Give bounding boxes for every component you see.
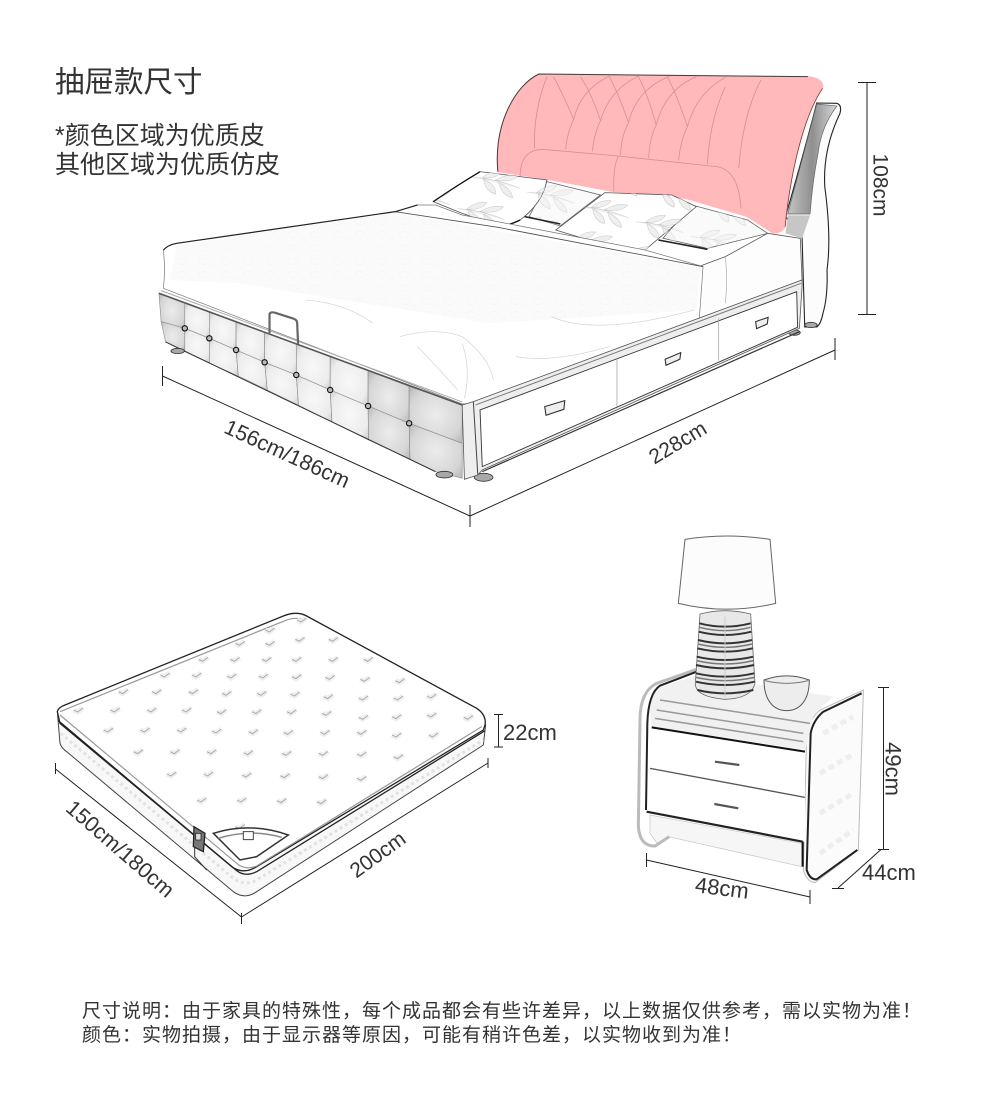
- dimension: mattress width 150cm/180cm: [56, 763, 242, 924]
- bowl: [764, 676, 809, 711]
- duvet: [163, 205, 703, 404]
- tufted foot panel: [159, 291, 462, 478]
- bottom panel: [650, 815, 802, 867]
- corner badge: [213, 828, 288, 860]
- mattress side: [57, 712, 486, 896]
- dimension: nightstand height 49cm: 49cm: [880, 742, 906, 796]
- dimension: mattress height 22cm: 22cm: [503, 720, 557, 745]
- lamp base: [695, 611, 755, 699]
- illustration: mattress: [57, 613, 486, 896]
- drawer fronts: [647, 727, 805, 842]
- left frame: [638, 669, 697, 846]
- dimension: nightstand depth 44cm: [832, 850, 916, 888]
- dimension: mattress length 200cm: [242, 758, 488, 917]
- illustration: bed: [159, 74, 841, 481]
- front post and rail: [462, 280, 802, 479]
- material note: *颜色区域为优质皮: [55, 122, 265, 150]
- panel buttons: [182, 326, 412, 426]
- dimension: nightstand width 48cm: [646, 853, 810, 904]
- dimension: bed depth 156cm/186cm: [162, 366, 470, 527]
- bed feet: [171, 322, 817, 481]
- front pillow left: [433, 172, 547, 225]
- leather headboard: [497, 74, 823, 233]
- dimension: bed length 228cm: [470, 338, 835, 516]
- footnote: [82, 1000, 922, 1046]
- dimension: nightstand width 48cm: 48cm: [694, 872, 750, 904]
- front pillow right: [556, 193, 696, 250]
- material note: 其他区域为优质仿皮: [55, 151, 280, 179]
- dimension: nightstand height 49cm: [878, 688, 906, 850]
- side panel: [803, 690, 863, 883]
- dimension: mattress width 150cm/180cm: 150cm/180cm: [61, 796, 179, 902]
- title: 抽屉款尺寸: [55, 66, 203, 99]
- mattress top: [57, 613, 485, 871]
- dimension: bed height 108cm: 108cm: [868, 153, 892, 217]
- footnote: 尺寸说明：由于家具的特殊性，每个成品都会有些许差异，以上数据仅供参考，需以实物为准！: [82, 1000, 922, 1022]
- lift handle: [270, 312, 298, 344]
- sheet on right of bed: [699, 233, 802, 320]
- zipper tag: [193, 827, 207, 870]
- table lamp: [678, 536, 776, 699]
- quilted marks: [74, 618, 473, 829]
- dimension: mattress length 200cm: 200cm: [346, 827, 410, 883]
- drawers: [480, 292, 799, 472]
- back pillow right: [663, 205, 768, 248]
- material note: [55, 122, 280, 179]
- footnote: 颜色：实物拍摄，由于显示器等原因，可能有稍许色差，以实物收到为准！: [82, 1024, 742, 1046]
- dimension: bed height 108cm: [858, 82, 892, 314]
- bed side panel: [786, 103, 841, 327]
- lamp shade: [678, 536, 776, 609]
- dimension: bed depth 156cm/186cm: 156cm/186cm: [221, 415, 353, 493]
- mattress piping: [58, 721, 485, 874]
- dimension: bed length 228cm: 228cm: [645, 417, 711, 469]
- dimension: nightstand depth 44cm: 44cm: [862, 860, 916, 885]
- back pillow centre: [529, 182, 600, 226]
- pillows: [433, 172, 768, 250]
- top surface: [650, 675, 833, 750]
- drawer handles: [545, 317, 768, 415]
- illustration: nightstand with lamp and bowl: [638, 536, 863, 883]
- dimension: mattress height 22cm: [494, 714, 557, 747]
